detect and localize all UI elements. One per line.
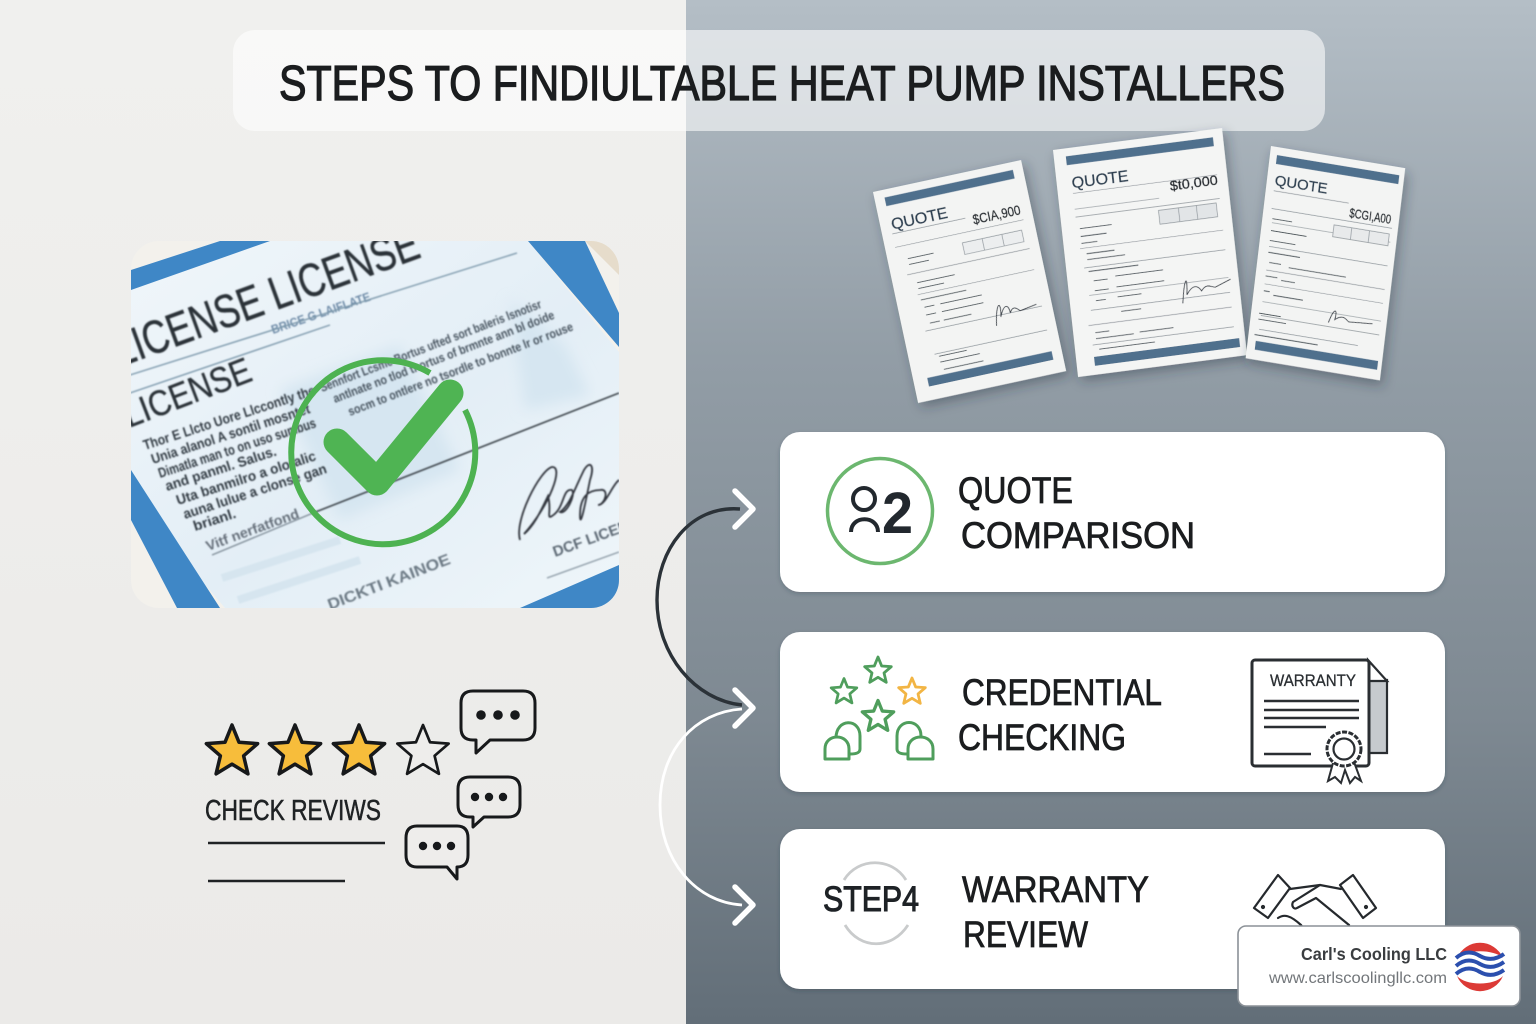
quote sheet 1: QUOTE [890,205,949,234]
quote documents [873,128,1405,403]
icon: warranty certificate: WARRANTY [1270,671,1356,690]
brand badge: Carl's Cooling LLC [1301,944,1447,964]
blue license border [131,241,619,608]
card heading [962,869,1149,955]
quote sheet 2 [1053,128,1247,377]
connector arrows [657,491,753,923]
card heading: WARRANTY [962,869,1149,910]
icon: warranty certificate [1252,660,1387,783]
license document text: Dimatla man to on uso sumbus [156,415,318,481]
license document text: socm to ontlere no tsordle to bonnte lr or rouse [346,320,575,419]
quote sheet 2: QUOTE [1071,168,1129,192]
quote sheet 2: $t0,000 [1169,172,1219,194]
license document text: and panml. Salus. [163,443,278,494]
right background panel [686,0,1536,1024]
white chevrons [735,491,753,923]
license document text: auna lulue a clonse gan [181,460,329,522]
icon: person and number two: 2 [882,481,913,546]
license document text: DICKTI KAINOE [325,551,453,614]
card: quote comparison [780,432,1445,592]
card heading: QUOTE [958,470,1073,511]
photo panel: license with check mark [131,241,619,608]
star rating [206,725,449,774]
card heading: CHECKING [958,717,1126,758]
white curved arrow [660,709,742,905]
quote sheet 3 [1246,146,1405,380]
license document text: BRICE G LAIFLATE [269,290,372,337]
speech bubbles [406,691,535,879]
quote sheet 3: QUOTE [1274,172,1329,197]
card: warranty review [780,829,1445,989]
signature line and marks [313,393,619,513]
license document text: brianl. [191,505,238,534]
license document text: LICENSE [117,349,257,435]
license document text: Vitf nerfatfond [204,505,301,554]
license document text: Thor E Llcto Uore Llccontly the [141,382,317,453]
icon: step 4: STEP4 [823,880,919,919]
license document text [131,241,619,608]
card heading: REVIEW [963,914,1088,955]
card heading: COMPARISON [961,515,1195,556]
watermark shapes [284,315,585,516]
icon: person and number two [828,458,932,564]
dark curved arrow [657,509,742,705]
quote sheet 1 [873,160,1066,403]
icon: handshake [1252,874,1378,926]
card heading [958,470,1195,556]
icon: step 4 [823,863,919,944]
left background panel [0,0,686,1024]
license document text: Unia alanol A sontil mosntet [149,400,312,467]
license document text: DCF LICEN [551,517,632,561]
license document text: antlnate no tlod thortus of brmnte ann bl doide [331,308,556,406]
card heading: CREDENTIAL [962,672,1162,713]
license document text: Sennfort Lcsme Bortus ufted sort baleris lsnotisr [318,297,544,395]
title banner [233,30,1325,131]
review label: CHECK REVIWS [205,795,381,827]
brand badge: www.carlscoolingllc.com [1268,970,1447,987]
check mark badge [291,360,475,544]
quote sheet 3: $CGI,A00 [1349,205,1392,227]
quote sheet 1: $CIA,900 [971,202,1022,227]
card: credential checking [780,632,1445,792]
logo [1456,943,1504,991]
title banner: STEPS TO FINDIULTABLE HEAT PUMP INSTALLERS [279,57,1285,111]
icon: stars and badges [825,657,933,759]
license document text: Uta banmilro a olofalic [174,447,318,508]
license document text: LICENSE LICENSE [105,216,426,376]
review block [205,691,535,881]
brand badge [1238,926,1520,1006]
card heading [958,672,1162,758]
